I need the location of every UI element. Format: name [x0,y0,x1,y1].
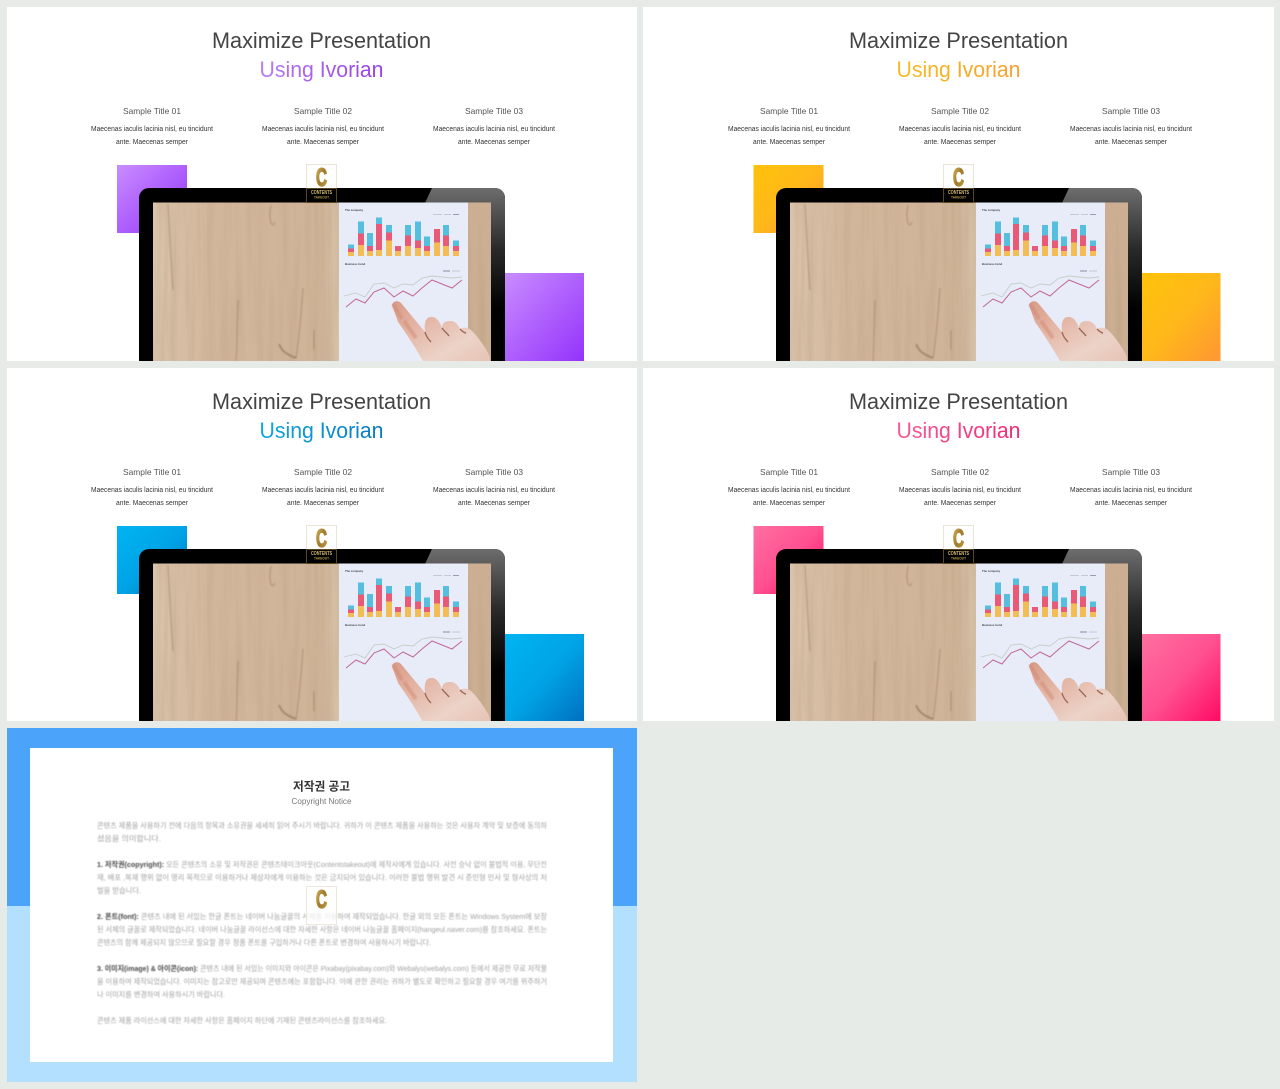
accent square bottom right [505,634,584,721]
accent square bottom right [505,273,584,361]
text block: copyright [97,860,547,895]
heading: Maximize Presentation [212,28,431,53]
logo: C [953,164,964,192]
logo [306,525,337,564]
logo [943,525,974,564]
text block: sample 3: Maecenas iaculis lacinia nisl, eu tincidunt [433,487,555,494]
text block: images and icons: 나 이미지를 변경하여 사용하시기 바랍니다. [97,990,225,999]
text block: sample 2: Sample Title 02 [294,467,352,477]
logo watermark: C [316,886,327,914]
monitor with photo of charts [139,188,505,361]
heading: Using Ivorian [896,418,1020,443]
text block: sample 2 [262,467,384,507]
monitor with photo of charts: Business trend [345,262,365,266]
heading [849,389,1068,443]
text block: sample 1: ante. Maecenas semper [753,139,826,146]
text block: sample 3: Sample Title 03 [1102,467,1160,477]
text block: font: 콘텐츠의 함께 제공되지 않으므로 필요할 경우 정품 폰트를 구입하거나 다른 폰트로 변경하여 사용하시기 바랍니다. [97,938,431,947]
logo: CONTENTS [311,551,333,557]
text block: sample 1: Sample Title 01 [760,467,818,477]
text block: sample 2: Sample Title 02 [931,106,989,116]
accent square top left [754,526,824,594]
accent square top left [117,526,187,594]
accent square top left [754,165,824,233]
text block: sample 1: Sample Title 01 [760,106,818,116]
text block: sample 1: Maecenas iaculis lacinia nisl, eu tincidunt [728,487,850,494]
monitor with photo of charts [776,188,1142,361]
logo [306,164,337,203]
panel: copyright notice slide [7,728,637,1082]
text block: sample 1: Sample Title 01 [123,467,181,477]
text block: sample 1: ante. Maecenas semper [116,500,189,507]
text block: images and icons: 을 이용하여 제작되었습니다. 이미지는 참고로만 제공되며 콘텐츠에는 포함합니다. 이에 관한 권리는 귀하가 별도로 확인하고 필요할 경우 여기를 위주하거 [97,977,547,986]
text block: sample 3: Sample Title 03 [465,467,523,477]
text block: sample 2: Maecenas iaculis lacinia nisl, eu tincidunt [899,126,1021,133]
logo: CONTENTS [948,551,970,557]
logo: TAKEOUT [314,556,330,560]
text block: copyright: 벌을 받습니다. [97,886,141,895]
monitor with photo of charts: Business trend [982,262,1002,266]
text block: sample 3: ante. Maecenas semper [1095,500,1168,507]
monitor with photo of charts: Business trend [345,623,365,627]
text block: sample 1: ante. Maecenas semper [116,139,189,146]
text block: sample 3: Maecenas iaculis lacinia nisl, eu tincidunt [433,126,555,133]
logo: C [316,164,327,192]
text block: sample 2 [899,467,1021,507]
text block: introduction: 셨음을 의미합니다. [97,834,161,843]
text block: sample 2: ante. Maecenas semper [924,500,997,507]
logo: TAKEOUT [314,196,330,200]
text block: sample 1: Maecenas iaculis lacinia nisl, eu tincidunt [91,487,213,494]
text block: sample 2: Sample Title 02 [931,467,989,477]
accent square bottom right [1142,634,1220,721]
text block: copyright: 재, 배포 ,복제 행위 없이 영리 목적으로 이용하거나 제삼자에게 이용하는 것은 금지되어 있습니다. 이러한 불법 행위 발견 시 준민형 민사 및 형사상의 처 [97,873,547,882]
heading: copyright notice [292,778,352,806]
text block: sample 1: Maecenas iaculis lacinia nisl, eu tincidunt [728,126,850,133]
panel: blue slide [7,368,637,722]
monitor with photo of charts: The company [345,569,363,573]
monitor with photo of charts [139,549,505,722]
text block: sample 2: Maecenas iaculis lacinia nisl, eu tincidunt [899,487,1021,494]
heading: Maximize Presentation [849,28,1068,53]
text block: images and icons [97,964,547,999]
heading: Using Ivorian [896,57,1020,82]
logo [943,164,974,203]
text block: font: 2. 폰트(font): 콘텐츠 내에 된 서있는 한글 폰트는 네이버 나눔글꼴의 서체를 이용하여 제작되었습니다. 한글 외의 모든 폰트는 Windows System에 보장 [97,912,547,921]
text block: sample 3: ante. Maecenas semper [458,500,531,507]
accent square top left [117,165,187,233]
text block: sample 3: ante. Maecenas semper [1095,139,1168,146]
text block: introduction: 콘텐츠 제품을 사용하기 전에 다음의 항목과 소유권을 세세히 읽어 주시기 바랍니다. 귀하가 이 콘텐츠 제품을 사용하는 것은 사용자 계약 및 보증에 동의하 [97,821,547,830]
text block: copyright: 1. 저작권(copyright): 모든 콘텐츠의 소유 및 저작권은 콘텐츠테이크아웃(Contentstakeout)에 제작사에게 있습니다. 사전 승낙 없이 불법적 이용, 무단전 [97,860,547,869]
text block: sample 3: Maecenas iaculis lacinia nisl, eu tincidunt [1070,126,1192,133]
text block: sample 2 [899,106,1021,146]
text block: font: 된 서체의 글꼴로 제작되었습니다. 네이버 나눔글꼴 라이선스에 대한 자세한 사항은 네이버 나눔글꼴 홈페이지(hangeul.naver.com)를 참조하세요. 폰트는 [97,925,547,934]
heading: Using Ivorian [260,57,384,82]
heading: Using Ivorian [260,418,384,443]
heading [212,389,431,443]
panel: orange slide [643,7,1274,361]
text block: sample 1: Sample Title 01 [123,106,181,116]
text block: sample 1 [91,467,213,507]
text block: sample 2: ante. Maecenas semper [924,139,997,146]
text block: sample 2 [262,106,384,146]
text block: sample 3 [1070,106,1192,146]
logo: CONTENTS [948,190,970,196]
logo watermark [306,886,337,925]
text block: licence note: 콘텐츠 제품 라이선스에 대한 자세한 사항은 홈페이지 하단에 기재된 콘텐츠라이선스를 참조하세요. [97,1016,387,1025]
logo: TAKEOUT [951,196,967,200]
text block: sample 2: Maecenas iaculis lacinia nisl, eu tincidunt [262,126,384,133]
monitor with photo of charts: The company [982,569,1000,573]
heading: Maximize Presentation [212,389,431,414]
text block: sample 1: Maecenas iaculis lacinia nisl, eu tincidunt [91,126,213,133]
heading: copyright notice: Copyright Notice [292,797,352,806]
text block: sample 1 [91,106,213,146]
text block: sample 1: ante. Maecenas semper [753,500,826,507]
monitor with photo of charts: The company [982,208,1000,212]
text block: font [97,912,547,947]
text block: sample 3 [433,467,555,507]
text block: sample 3 [1070,467,1192,507]
text block: sample 3 [433,106,555,146]
heading: copyright notice: 저작권 공고 [293,778,350,794]
text block: sample 3: ante. Maecenas semper [458,139,531,146]
panel: purple slide [7,7,637,361]
text block: sample 1 [728,106,850,146]
logo: C [316,525,327,553]
text block: sample 2: Sample Title 02 [294,106,352,116]
text block: introduction [97,821,547,843]
text block: sample 3: Sample Title 03 [465,106,523,116]
heading [212,28,431,82]
text block: sample 2: ante. Maecenas semper [287,139,360,146]
monitor with photo of charts: The company [345,208,363,212]
logo: TAKEOUT [951,556,967,560]
text block: sample 2: ante. Maecenas semper [287,500,360,507]
monitor with photo of charts [776,549,1142,722]
heading [849,28,1068,82]
accent square bottom right [1142,273,1220,361]
monitor with photo of charts: Business trend [982,623,1002,627]
panel: pink slide [643,368,1274,722]
logo: CONTENTS [311,190,333,196]
text block: images and icons: 3. 이미지(image) & 아이콘(icon): 콘텐츠 내에 된 서있는 이미지와 아이콘은 Pixabay(pixabay.com)와 Webalys(webalys.com) 등에서 제공한 무료 저작물 [97,964,547,973]
text block: sample 2: Maecenas iaculis lacinia nisl, eu tincidunt [262,487,384,494]
logo: C [953,525,964,553]
text block: sample 3: Sample Title 03 [1102,106,1160,116]
text block: sample 1 [728,467,850,507]
heading: Maximize Presentation [849,389,1068,414]
text block: sample 3: Maecenas iaculis lacinia nisl, eu tincidunt [1070,487,1192,494]
